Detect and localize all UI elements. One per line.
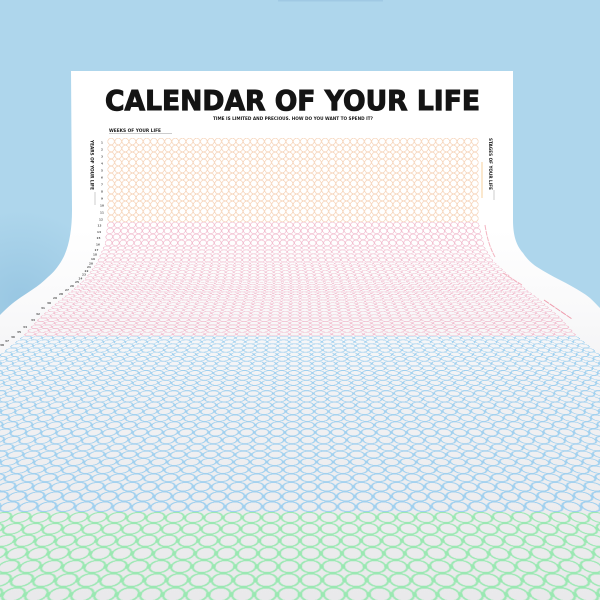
year numbers along the left edge: 15	[97, 236, 100, 240]
year numbers along the left edge: 16	[96, 242, 100, 246]
stage marker: pink three	[544, 300, 572, 319]
year numbers along the left edge: 23	[82, 272, 86, 276]
year numbers along the left edge: 24	[79, 276, 82, 280]
subtitle: TIME IS LIMITED AND PRECIOUS. HOW DO YOU WANT TO SPEND IT?	[213, 116, 373, 122]
year numbers along the left edge: 36	[11, 335, 15, 339]
year numbers along the left edge: 38	[0, 343, 4, 347]
years axis label: YEARS OF YOUR LIFE	[88, 139, 94, 190]
year numbers along the left edge: 30	[47, 301, 51, 305]
year numbers along the left edge: 12	[99, 218, 103, 222]
year numbers along the left edge: 4	[101, 162, 103, 166]
year numbers along the left edge: 18	[93, 252, 97, 256]
year numbers along the left edge: 29	[53, 296, 57, 300]
stages axis label	[487, 138, 494, 200]
year numbers along the left edge: 28	[59, 292, 63, 296]
title: CALENDAR OF YOUR LIFE	[105, 86, 480, 117]
year numbers along the left edge: 35	[17, 330, 21, 334]
year numbers along the left edge: 7	[101, 182, 103, 186]
year numbers along the left edge: 27	[65, 288, 69, 292]
stage marker: childhood	[481, 162, 483, 198]
year numbers along the left edge: 9	[101, 196, 103, 200]
year numbers along the left edge: 21	[87, 265, 91, 269]
year numbers along the left edge: 17	[95, 248, 98, 252]
year numbers along the left edge: 6	[101, 176, 103, 180]
year numbers along the left edge: 34	[23, 325, 27, 329]
stages axis label: STAGES OF YOUR LIFE	[487, 138, 493, 190]
year numbers along the left edge: 22	[85, 269, 88, 273]
year numbers along the left edge: 3	[101, 154, 103, 158]
year numbers along the left edge: 8	[101, 190, 103, 194]
year numbers along the left edge: 10	[100, 204, 104, 208]
year numbers along the left edge	[0, 140, 104, 347]
weeks axis label	[109, 128, 172, 134]
year numbers along the left edge: 25	[75, 280, 79, 284]
year numbers along the left edge: 26	[70, 284, 74, 288]
orange stage rows	[107, 138, 478, 222]
year numbers along the left edge: 32	[36, 312, 40, 316]
weeks axis label: WEEKS OF YOUR LIFE	[109, 128, 161, 134]
year numbers along the left edge: 5	[101, 168, 103, 172]
year numbers along the left edge: 11	[100, 210, 104, 214]
stage marker: pink one	[485, 225, 495, 257]
year numbers along the left edge: 31	[41, 306, 45, 310]
year numbers along the left edge: 2	[101, 148, 103, 152]
year numbers along the left edge: 14	[97, 230, 101, 234]
year numbers along the left edge: 19	[91, 257, 95, 261]
year numbers along the left edge: 33	[31, 318, 35, 322]
year numbers along the left edge: 1	[101, 140, 103, 144]
years axis label	[88, 139, 95, 205]
year numbers along the left edge: 37	[5, 339, 9, 343]
year numbers along the left edge: 20	[89, 262, 93, 266]
stage marker: pink two	[503, 273, 522, 285]
year numbers along the left edge: 13	[98, 224, 101, 228]
